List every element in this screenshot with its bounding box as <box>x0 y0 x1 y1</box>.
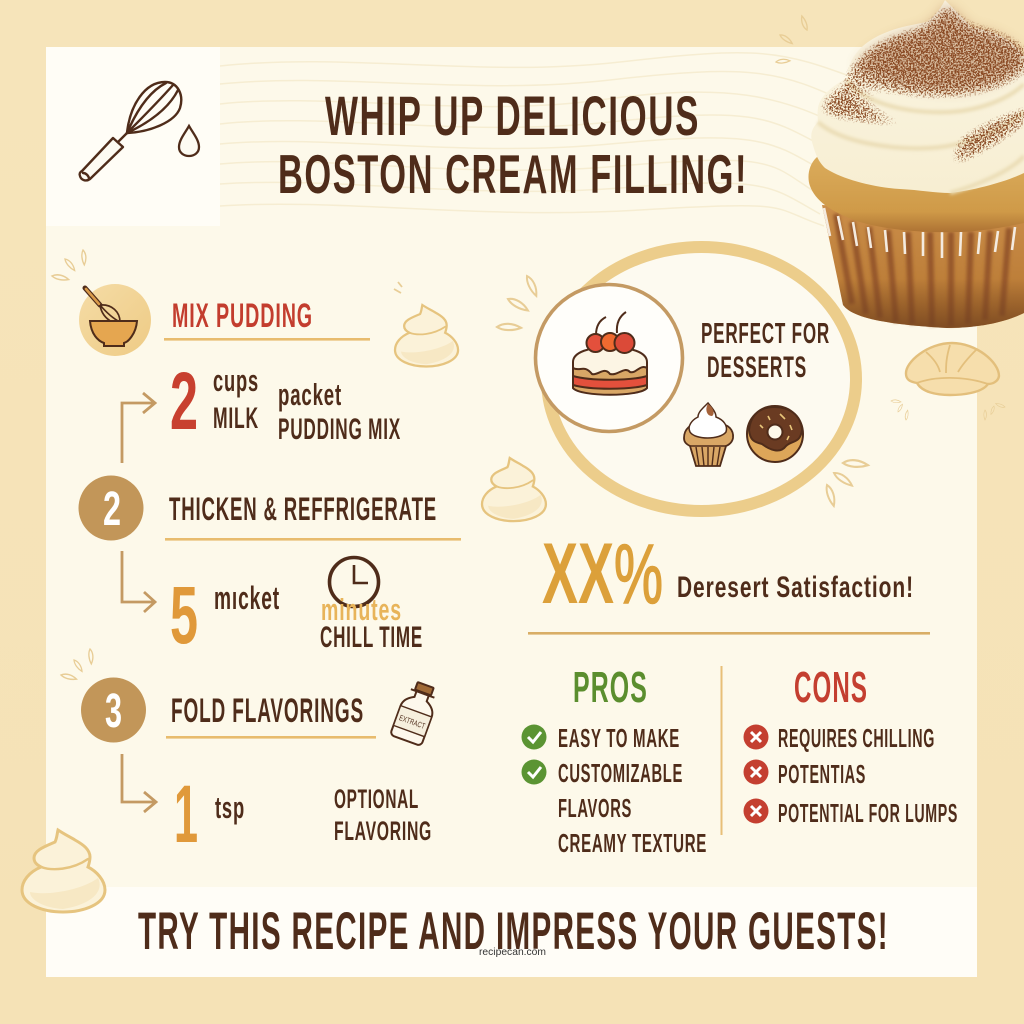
title: WHIP UP DELICIOUS <box>325 84 700 147</box>
panel: pros: CUSTOMIZABLE <box>558 758 683 788</box>
corner box with whisk icon <box>46 47 220 226</box>
sparkles near cupcake <box>776 15 809 64</box>
whipped cream 2 <box>482 458 546 521</box>
step 1: mix pudding: MILK <box>213 402 259 435</box>
icon: extract bottle: EXTRACT <box>398 713 426 731</box>
decorative contour lines <box>220 53 860 226</box>
sparkles <box>497 275 868 507</box>
satisfaction stat: % <box>614 527 663 621</box>
icon: check <box>522 760 546 784</box>
outer ring <box>547 247 856 511</box>
sparkles <box>61 649 94 681</box>
heading: FOLD FLAVORINGS <box>171 692 364 730</box>
arrow <box>122 551 155 612</box>
icon: mixing bowl badge <box>79 284 151 356</box>
cupcake cake top <box>808 150 1024 232</box>
perfect for desserts ring: DESSERTS <box>707 351 807 384</box>
panel: cons: POTENTIAS <box>778 759 866 789</box>
icon: cross <box>744 798 768 824</box>
arrow <box>122 393 155 463</box>
icon: cake <box>573 312 647 395</box>
satisfaction stat <box>542 526 914 622</box>
satisfaction stat: XX <box>542 526 614 622</box>
cocoa tint <box>856 4 1024 90</box>
icon: check <box>522 724 546 750</box>
arrow <box>122 754 156 812</box>
title <box>278 84 748 205</box>
number badge: 2 <box>103 483 121 536</box>
step 3: fold flavorings: OPTIONAL <box>334 784 419 814</box>
panel: pros: CREAMY TEXTURE <box>558 828 707 858</box>
panel: pros <box>522 663 707 858</box>
step 2: thicken and refrigerate: minutes <box>321 592 402 627</box>
icon: droplet <box>179 126 199 156</box>
cons heading: CONS <box>794 663 868 712</box>
step 1: mix pudding <box>52 250 401 463</box>
footer band <box>46 887 977 977</box>
number badge: 3 <box>105 685 122 738</box>
whipped cream 1 <box>395 305 458 366</box>
heading: THICKEN & REFFRIGERATE <box>169 491 437 527</box>
amount 5: 5 <box>170 570 198 661</box>
step 1: mix pudding: cups <box>213 363 259 398</box>
icon: extract bottle <box>390 679 441 746</box>
croissant sparkles <box>891 400 1005 420</box>
panel: cons <box>744 663 958 828</box>
heading: MIX PUDDING <box>172 297 313 335</box>
pros heading: PROS <box>573 663 648 712</box>
amount 1: 1 <box>174 769 198 860</box>
step 1: mix pudding: packet <box>278 377 342 412</box>
panel: pros: FLAVORS <box>558 793 632 823</box>
step 2: thicken and refrigerate <box>78 476 461 661</box>
icon: cross <box>744 724 768 750</box>
icon: cross <box>744 760 768 784</box>
cupcake image <box>808 0 1024 328</box>
croissant <box>906 343 999 395</box>
whipped cream 3 <box>22 830 105 912</box>
label: PERFECT FOR <box>701 318 830 350</box>
watermark: recipecan.com <box>479 947 546 958</box>
number badge <box>81 678 146 742</box>
icon: donut <box>747 406 803 462</box>
icon: small cupcake <box>684 403 733 466</box>
sparkles <box>52 250 87 281</box>
step 3: fold flavorings: FLAVORING <box>334 816 432 846</box>
step 1: mix pudding: PUDDING MIX <box>278 413 401 446</box>
panel: pros: EASY TO MAKE <box>558 723 680 753</box>
cupcake frosting <box>811 0 1024 193</box>
perfect for desserts ring <box>497 247 868 511</box>
cupcake cocoa dusting <box>812 0 1024 176</box>
sparkle ticks <box>394 282 402 293</box>
satisfaction stat: Deresert Satisfaction! <box>677 571 914 604</box>
step 2: thicken and refrigerate: CHILL TIME <box>320 621 423 654</box>
step 3: fold flavorings: tsp <box>215 790 245 825</box>
icon: clock <box>330 558 378 606</box>
cupcake wrapper <box>822 205 1024 328</box>
icon: whisk <box>80 82 181 180</box>
amount 2: 2 <box>170 356 198 447</box>
title: BOSTON CREAM FILLING! <box>278 143 748 205</box>
step 3: fold flavorings <box>61 649 441 860</box>
inner circle <box>536 284 682 432</box>
number badge <box>78 476 144 540</box>
step 2: thicken and refrigerate: mıcket <box>214 580 280 616</box>
